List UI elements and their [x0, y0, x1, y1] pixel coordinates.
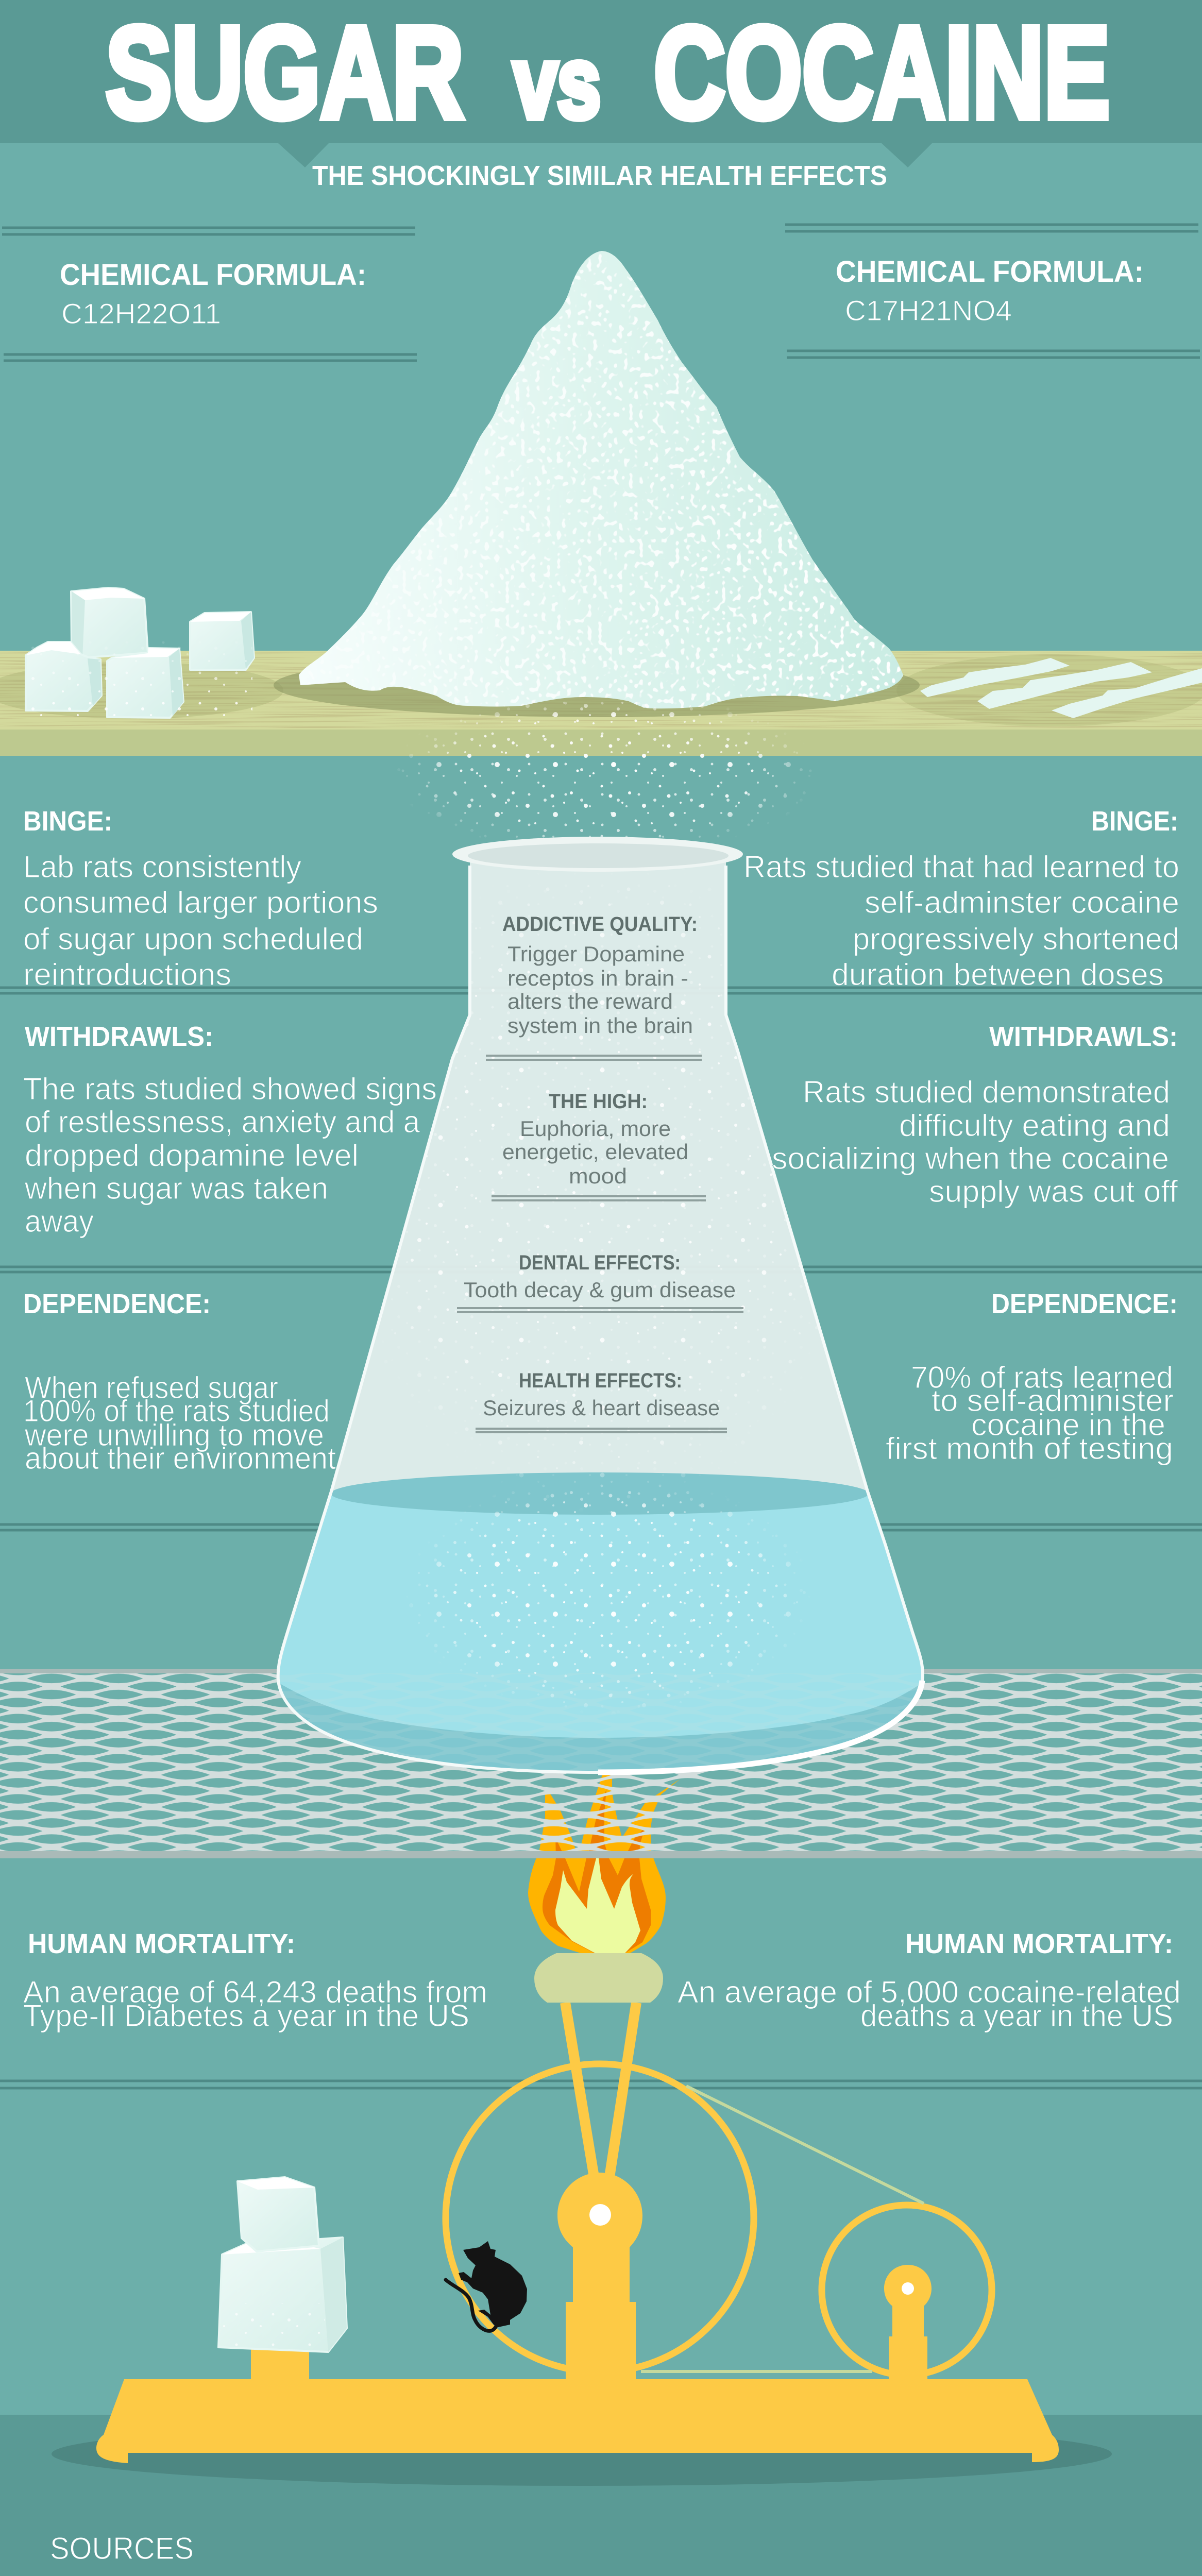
cocaine withdrawals text: difficulty eating and	[899, 1108, 1170, 1143]
sugar binge text: BINGE:	[23, 806, 112, 837]
title: SUGAR	[106, 0, 464, 145]
cocaine dependence text: cocaine in the	[971, 1408, 1165, 1442]
sugar binge text: Lab rats consistently	[23, 850, 301, 884]
flask: addictive quality: Trigger Dopamine	[507, 942, 685, 966]
sugar formula: CHEMICAL FORMULA:	[60, 258, 366, 292]
cocaine dependence text: first month of testing	[886, 1431, 1173, 1466]
cocaine mortality text: An average of 5,000 cocaine-related	[678, 1975, 1181, 2009]
wire mesh	[0, 1669, 1202, 1858]
flask: addictive quality: receptos in brain -	[507, 966, 688, 990]
flame	[528, 1773, 680, 1953]
cocaine dependence text	[886, 1289, 1178, 1466]
glass body	[278, 858, 923, 1772]
flask rim	[452, 837, 743, 872]
small wheel	[822, 2205, 992, 2375]
cocaine withdrawals text: Rats studied demonstrated	[803, 1075, 1170, 1109]
burner stand legs	[565, 2003, 636, 2177]
falling sugar grains	[398, 702, 812, 838]
belts	[641, 2086, 924, 2371]
cocaine dependence text: to self-administer	[932, 1383, 1174, 1418]
sugar withdrawals text: WITHDRAWLS:	[25, 1021, 213, 1052]
flask: dental effects	[457, 1251, 743, 1312]
ground shadow	[52, 2422, 1112, 2486]
flask: addictive quality: alters the reward	[507, 989, 673, 1013]
cocaine mortality text	[678, 1928, 1181, 2033]
flask: addictive quality: ADDICTIVE QUALITY:	[502, 913, 698, 936]
subtitle: THE SHOCKINGLY SIMILAR HEALTH EFFECTS	[312, 160, 887, 191]
sugar binge text: reintroductions	[23, 957, 231, 992]
sugar mortality text	[23, 1928, 487, 2033]
title: vs	[514, 26, 601, 139]
wire mesh and flame	[0, 1669, 1202, 1953]
sugar mortality text: An average of 64,243 deaths from	[23, 1975, 487, 2009]
flask: health effects: HEALTH EFFECTS:	[519, 1369, 682, 1392]
flask: the high: energetic, elevated	[502, 1140, 688, 1164]
flask: the high: THE HIGH:	[549, 1090, 648, 1113]
cocaine mortality text: deaths a year in the US	[860, 1998, 1173, 2033]
sugar formula	[60, 258, 366, 330]
flask: health effects	[476, 1369, 727, 1432]
cocaine lines	[920, 658, 1202, 718]
flask	[273, 837, 927, 1776]
cocaine binge text: self-adminster cocaine	[865, 885, 1179, 920]
sugar withdrawals text: when sugar was taken	[24, 1171, 328, 1206]
sugar binge text: of sugar upon scheduled	[23, 922, 363, 956]
wheel machine	[96, 2003, 1059, 2463]
cocaine formula: CHEMICAL FORMULA:	[836, 255, 1144, 289]
big hub and column	[557, 2173, 642, 2379]
bottom band	[0, 2415, 1202, 2576]
cocaine binge text: duration between doses	[832, 957, 1164, 992]
sugar withdrawals text: away	[25, 1204, 94, 1239]
flask: addictive quality	[486, 913, 702, 1060]
sugar binge text	[23, 806, 378, 992]
sugar mountain	[289, 247, 917, 716]
cocaine withdrawals text: socializing when the cocaine	[772, 1141, 1169, 1176]
flask: addictive quality: system in the brain	[507, 1013, 693, 1038]
sugar mortality text: HUMAN MORTALITY:	[28, 1928, 295, 1959]
cocaine binge text: progressively shortened	[853, 922, 1179, 956]
sugar dependence text: about their environment	[25, 1441, 336, 1476]
sugar dependence text: DEPENDENCE:	[23, 1289, 211, 1319]
cocaine formula: C17H21NO4	[845, 294, 1012, 327]
small hub and column	[884, 2265, 932, 2379]
sugar cubes on post	[218, 2177, 347, 2352]
cocaine withdrawals text: WITHDRAWLS:	[989, 1021, 1178, 1052]
sugar withdrawals text: of restlessness, anxiety and a	[25, 1105, 420, 1139]
mouse	[446, 2241, 527, 2331]
sugar withdrawals text: dropped dopamine level	[25, 1138, 359, 1173]
flask: the high	[492, 1090, 706, 1200]
wooden table	[0, 651, 1202, 756]
flask outline	[278, 866, 923, 1772]
title	[106, 0, 1110, 145]
cocaine mortality text: HUMAN MORTALITY:	[905, 1928, 1173, 1959]
cocaine binge text	[743, 806, 1179, 992]
cocaine withdrawals text	[772, 1021, 1178, 1209]
flask: dental effects: DENTAL EFFECTS:	[519, 1251, 681, 1274]
cocaine binge text: BINGE:	[1091, 806, 1178, 837]
flask: the high: mood	[569, 1164, 627, 1188]
sugar withdrawals text	[23, 1021, 437, 1239]
cube post	[251, 2347, 309, 2383]
cocaine dependence text: 70% of rats learned	[911, 1360, 1173, 1395]
sources: SOURCES	[50, 2531, 194, 2566]
sugar mortality text: Type-II Diabetes a year in the US	[23, 1998, 469, 2033]
sugar binge text: consumed larger portions	[23, 885, 378, 920]
sugar grains in flask	[394, 885, 806, 1707]
machine base	[96, 2379, 1059, 2463]
sugar dependence text	[23, 1289, 336, 1476]
cocaine formula	[836, 255, 1144, 327]
header band	[0, 0, 1202, 167]
sugar dependence text: were unwilling to move	[24, 1418, 324, 1452]
sugar dependence text: 100% of the rats studied	[23, 1394, 330, 1428]
flask: dental effects: Tooth decay & gum disease	[464, 1278, 736, 1302]
liquid	[273, 1472, 927, 1776]
cocaine withdrawals text: supply was cut off	[929, 1174, 1178, 1209]
cocaine dependence text: DEPENDENCE:	[991, 1289, 1178, 1319]
sugar formula: C12H22O11	[61, 297, 221, 330]
flask: health effects: Seizures & heart disease	[483, 1396, 720, 1420]
sugar withdrawals text: The rats studied showed signs	[23, 1072, 437, 1106]
big wheel	[446, 2064, 754, 2372]
flask: the high: Euphoria, more	[520, 1116, 671, 1141]
cocaine binge text: Rats studied that had learned to	[743, 850, 1179, 884]
burner	[534, 1953, 663, 2003]
sugar cubes	[26, 588, 254, 718]
sugar dependence text: When refused sugar	[25, 1370, 278, 1405]
